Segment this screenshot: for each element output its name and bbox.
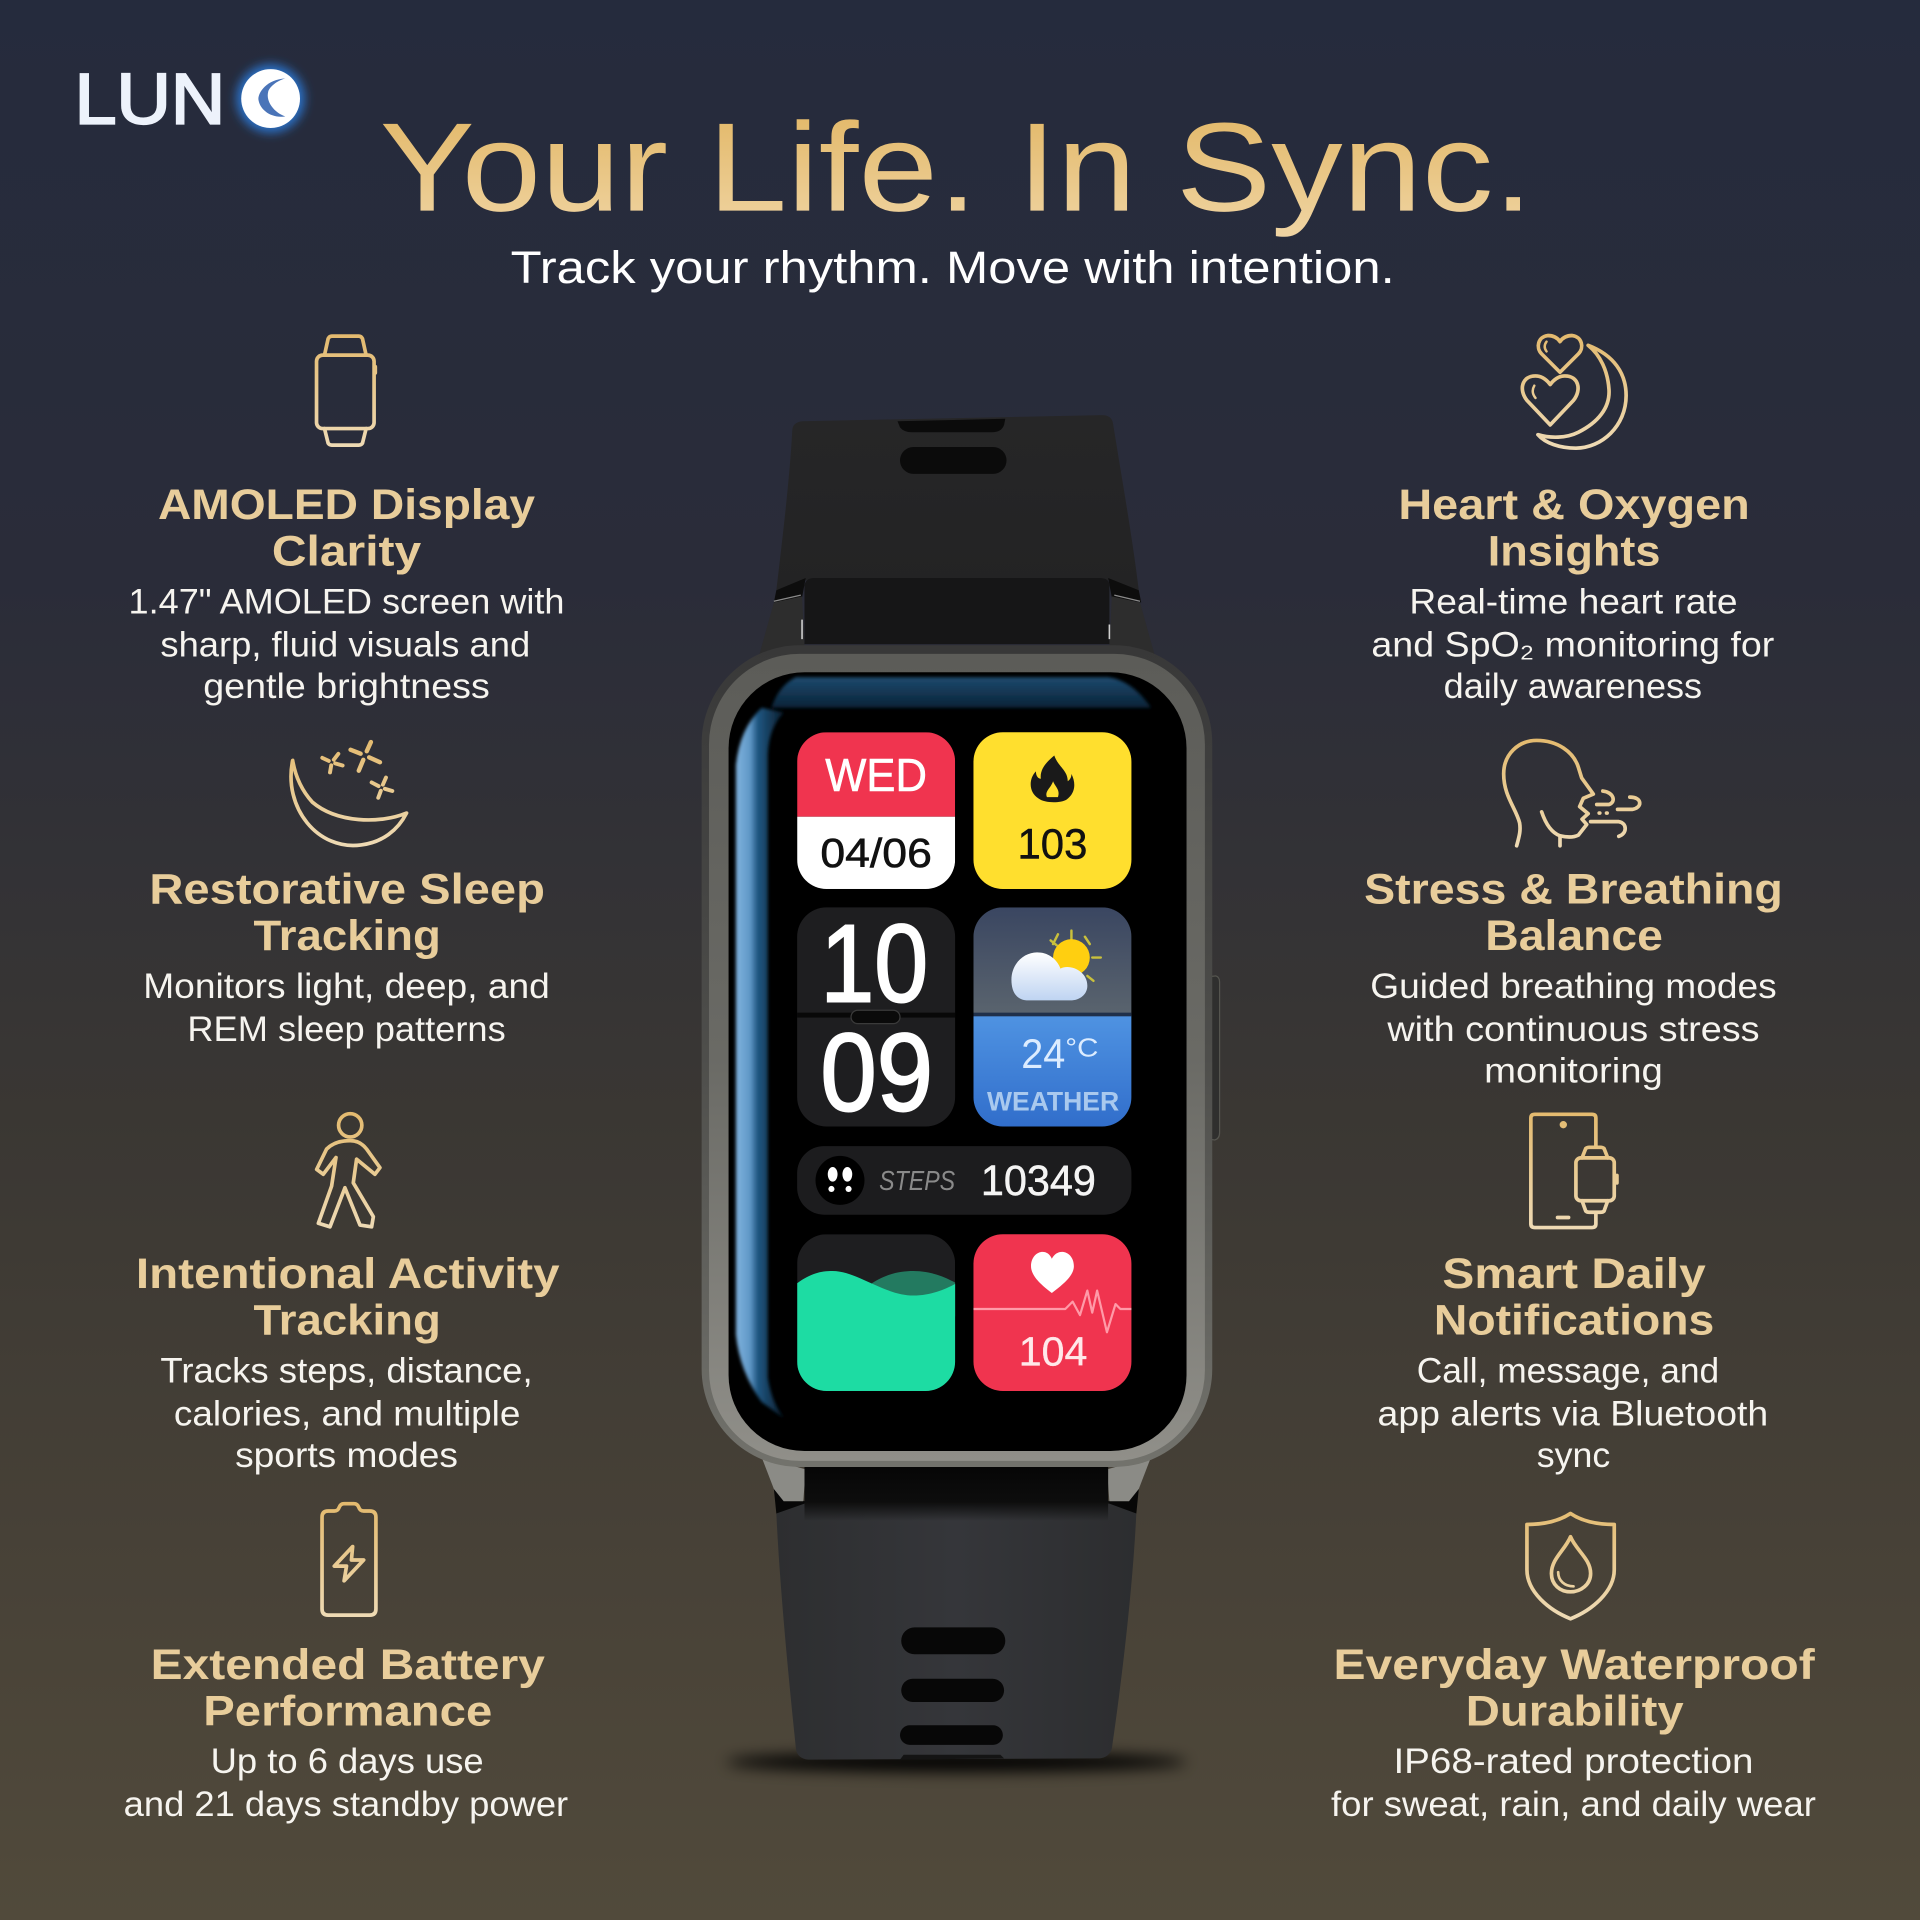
heading: [151, 1641, 545, 1735]
description: daily awareness: [1444, 666, 1702, 706]
tile: calories: [973, 732, 1131, 889]
description: and SpO₂ monitoring for: [1371, 624, 1774, 664]
top strap: [776, 415, 1139, 590]
tile: time: 09: [820, 1012, 933, 1135]
heading: [158, 481, 535, 576]
description: with continuous stress: [1386, 1009, 1760, 1049]
heading: AMOLED Display: [158, 481, 535, 529]
description: gentle brightness: [203, 666, 490, 706]
panel: Intentional Activity Tracking: [136, 1114, 560, 1475]
description: monitoring: [1484, 1050, 1663, 1090]
description: [143, 966, 550, 1049]
description: [160, 1350, 533, 1475]
heading: Insights: [1488, 528, 1660, 576]
tile: weather: °C: [1065, 1035, 1098, 1063]
heading: [136, 1250, 560, 1345]
panel: Extended Battery Performance: [124, 1504, 568, 1824]
description: Monitors light, deep, and: [143, 966, 550, 1006]
ground shadow: [726, 1752, 1187, 1772]
heading: Extended Battery: [151, 1641, 545, 1689]
description: calories, and multiple: [174, 1393, 520, 1433]
description: [1378, 1350, 1768, 1475]
description: for sweat, rain, and daily wear: [1331, 1784, 1816, 1824]
tile: activity wave: [797, 1234, 956, 1392]
heading: Tracking: [253, 1297, 441, 1345]
heading: [1333, 1641, 1816, 1735]
description: 1.47" AMOLED screen with: [129, 581, 564, 621]
tile: weather: 24: [1021, 1030, 1065, 1077]
heading: Everyday Waterproof: [1333, 1641, 1816, 1689]
tile: time: 10: [820, 903, 928, 1026]
panel: AMOLED Display Clarity: [129, 336, 564, 706]
screen reflection: [736, 677, 1151, 1418]
subtitle: Track your rhythm. Move with intention.: [511, 242, 1395, 293]
crown button: [1206, 976, 1220, 1140]
lower lugs: [762, 1457, 1151, 1521]
heading: Restorative Sleep: [149, 866, 545, 914]
heading: Heart & Oxygen: [1398, 481, 1750, 529]
description: app alerts via Bluetooth: [1378, 1393, 1768, 1433]
description: [124, 1741, 568, 1824]
description: sports modes: [235, 1435, 458, 1475]
description: Real-time heart rate: [1409, 581, 1738, 621]
upper lugs: [759, 578, 1155, 655]
heading: [1434, 1250, 1714, 1345]
description: [129, 581, 564, 706]
description: Guided breathing modes: [1370, 966, 1777, 1006]
heading: [1398, 481, 1750, 576]
icon: hearts and moon: [1522, 336, 1626, 448]
icon: breathing head: [1504, 740, 1640, 846]
bottom strap: [776, 1467, 1136, 1760]
tile: time: [797, 903, 955, 1135]
icon: shield and drop: [1527, 1513, 1614, 1619]
description: IP68-rated protection: [1393, 1741, 1753, 1781]
heading: Intentional Activity: [136, 1250, 560, 1298]
tile: weather: WEATHER: [987, 1087, 1119, 1117]
heading: Clarity: [272, 528, 421, 576]
panel: Stress & Breathing Balance: [1364, 740, 1783, 1090]
case: [702, 645, 1212, 1467]
tile: steps: STEPS: [879, 1165, 955, 1196]
description: [1331, 1741, 1816, 1824]
description: [1370, 966, 1777, 1090]
heading: [1364, 866, 1783, 960]
heading: Durability: [1466, 1687, 1684, 1735]
heading: Balance: [1485, 912, 1663, 960]
heading: Tracking: [253, 912, 441, 960]
tile: steps: [797, 1146, 1131, 1215]
logo: LUNO: [75, 61, 305, 140]
icon: moon and stars: [291, 742, 407, 845]
icon: phone and watch: [1531, 1114, 1617, 1228]
panel: Everyday Waterproof Durability: [1331, 1513, 1816, 1824]
description: sync: [1537, 1435, 1610, 1475]
heading: Notifications: [1434, 1297, 1714, 1345]
tile: heart rate: [973, 1234, 1131, 1391]
panel: Restorative Sleep Tracking: [143, 742, 550, 1049]
description: REM sleep patterns: [187, 1009, 506, 1049]
tile: calories: 103: [1018, 820, 1087, 868]
icon: watch: [317, 336, 375, 445]
title: Your Life. In Sync.: [380, 97, 1533, 238]
tile: steps: 10349: [981, 1157, 1096, 1205]
description: [1371, 581, 1774, 706]
description: Tracks steps, distance,: [160, 1350, 533, 1390]
panel: Heart & Oxygen Insights: [1371, 336, 1774, 706]
description: sharp, fluid visuals and: [160, 624, 530, 664]
tile: weather: [973, 907, 1131, 1127]
tile: date: WED: [825, 749, 927, 801]
tile: date: 04/06: [820, 830, 932, 876]
heading: [149, 866, 545, 960]
heading: Stress & Breathing: [1364, 866, 1783, 914]
heading: Performance: [203, 1687, 492, 1735]
heading: Smart Daily: [1442, 1250, 1706, 1298]
icon: walking person: [317, 1114, 380, 1227]
panel: Smart Daily Notifications: [1378, 1114, 1768, 1475]
icon: battery: [322, 1504, 376, 1615]
smartwatch: [702, 415, 1220, 1772]
description: Up to 6 days use: [211, 1741, 484, 1781]
description: Call, message, and: [1417, 1350, 1719, 1390]
description: and 21 days standby power: [124, 1784, 568, 1824]
logo: LUNO: LUN: [75, 61, 225, 140]
tile: heart rate: 104: [1019, 1328, 1087, 1374]
tile: date: [797, 732, 955, 889]
